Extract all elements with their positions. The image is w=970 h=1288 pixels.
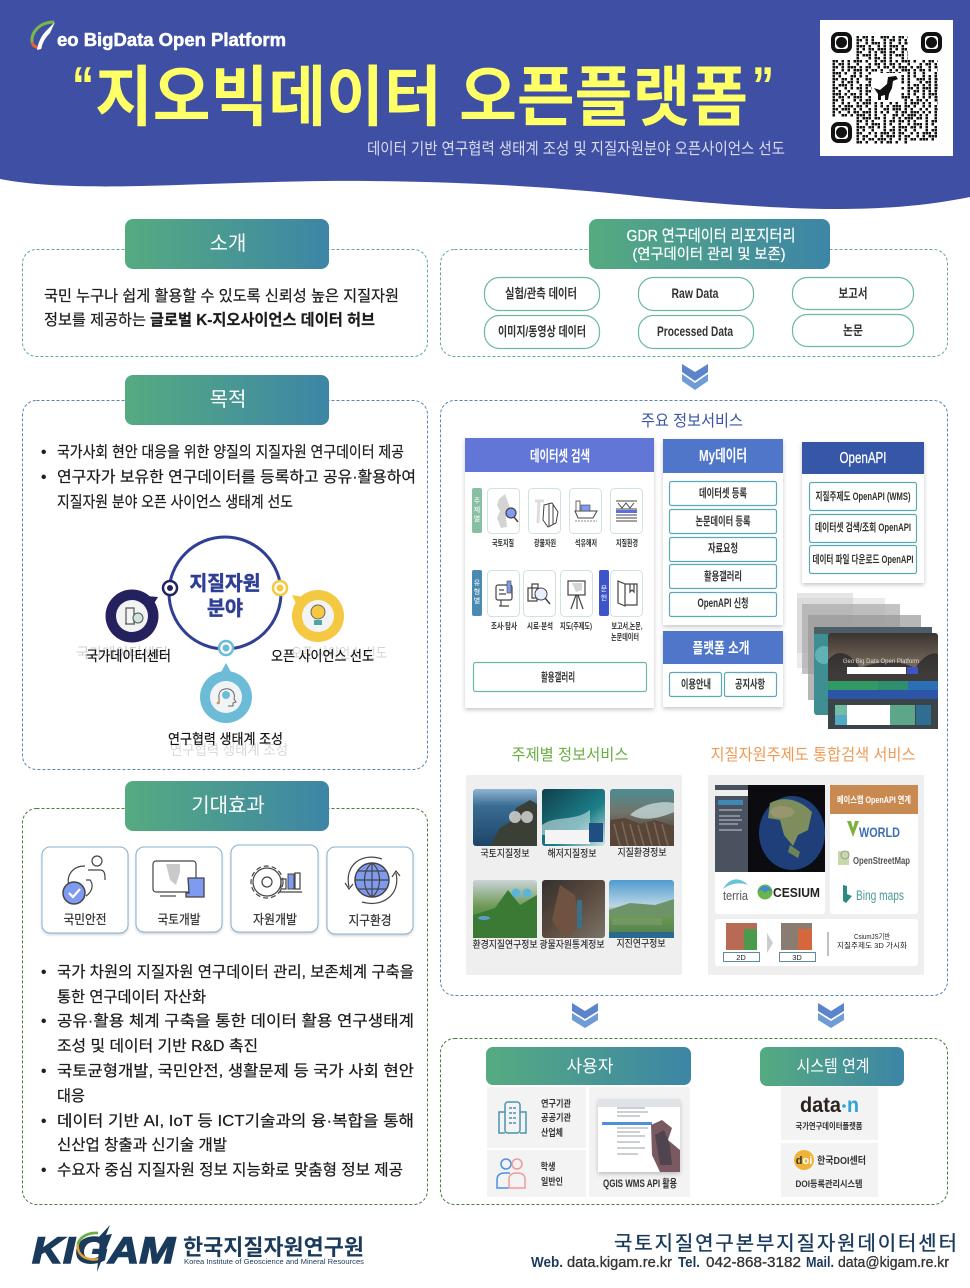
text: 기대효과 bullets [41,963,414,1179]
tag: 유형별: 형 [474,588,480,596]
tile: 조사·탐사 [488,570,520,631]
card: 국토개발: 국토개발 [158,912,201,927]
center circle: 지질자원 [190,572,260,595]
data type pills: Raw Data [672,285,719,301]
card: My데이터: 데이터셋 등록 [699,486,747,500]
heading: 시스템 연계 [760,1047,904,1086]
2D/3D visualization strip: 3D [792,953,802,962]
thumbnail: 지질환경정보 [610,789,674,859]
node rings [163,581,287,655]
basemap panel [830,785,918,914]
system: 한국DOI센터 [781,1143,878,1197]
QR code [820,20,953,156]
system: data·on [781,1087,878,1140]
heading: 주제별 정보서비스: 주제별 정보서비스 [512,746,628,764]
panel: GDR 리포지터리 [440,219,948,356]
system: 한국DOI센터: doi [796,1155,812,1167]
card: My데이터: My데이터 [699,447,747,465]
center circle [169,537,281,649]
user: 연구기관 공공기관 산업체: 공공기관 [541,1112,571,1124]
card: 데이터셋 검색: 데이터셋 검색 [530,448,590,465]
user: 학생 일반인: 일반인 [541,1176,563,1188]
tag: 주제별: 제 [474,506,480,514]
tile: 석유해저 [570,488,602,548]
card: 플랫폼 소개: 플랫폼 소개 [692,640,750,657]
card: OpenAPI [802,442,924,583]
tile: 지질환경: 지질환경 [616,538,638,548]
thumbnail: 지진연구정보: 지진연구정보 [616,938,666,950]
text: 기대효과 bullets: 수요자 중심 지질자원 정보 지능화로 맞춤형 정보 제공 [57,1161,403,1179]
tag: 문헌 [599,570,609,616]
footer logo: KIGAM: 한국지질자원연구원 [183,1235,364,1260]
basemap panel: 베이스맵 OpenAPI 연계 [837,794,911,805]
tag: 문헌: 헌 [601,594,607,602]
footer: contact: data.kigam.re.kr [567,1254,672,1271]
system: 한국DOI센터: 한국DOI센터 [817,1154,866,1167]
subtitle: 데이터 기반 연구협력 생태계 조성 및 지질자원분야 오픈사이언스 선도 [367,140,785,158]
node: 국가데이터센터: 국가데이터센터 [86,648,171,664]
panel: 사용자 / 시스템 연계 [440,1038,948,1204]
title: ” [752,57,774,115]
footer: contact: Web. [531,1254,563,1271]
heading: 사용자 [486,1047,691,1085]
node: 국가데이터센터 [76,590,171,664]
tile: 시료·분석: 시료·분석 [527,621,553,631]
thumbnail: 해저지질정보 [542,789,605,860]
tile: 국토지질: 국토지질 [492,538,514,548]
tile: 보고서,논문,논문데이터: 논문데이터 [611,632,639,642]
viewer: terria + cesium: CESIUM [773,885,820,900]
text: 소개 body [44,287,399,329]
2D/3D visualization strip: CsiumJS기반 [854,932,890,941]
tile: 석유해저: 석유해저 [575,538,597,548]
footer logo: KIGAM: Korea Institute of Geoscience and Mineral Resources [184,1259,365,1266]
text: 기대효과 bullets: 국토균형개발, 국민안전, 생활문제 등 국가 사회 현안 [57,1062,414,1080]
tag: 유형별 [472,570,482,616]
card: My데이터: 자료요청 [708,541,738,555]
tag: 주제별: 별 [474,514,480,523]
text: 기대효과 bullets: • [41,1063,46,1080]
user: 학생 일반인 [487,1150,586,1197]
button: 활용갤러리 [474,662,646,692]
thumbnail: 국토지질정보 [473,789,537,860]
thumbnail: 국토지질정보: 국토지질정보 [480,848,530,860]
heading: GDR 연구데이터 리포지터리: (연구데이터 관리 및 보존) [632,246,786,263]
card: My데이터: OpenAPI 신청 [698,596,748,610]
heading: 목적: 목적 [210,388,246,411]
tag: 문헌: 문 [601,585,608,593]
card: My데이터: 활용갤러리 [704,569,742,583]
thumbnail: 환경지질연구정보 [472,880,538,951]
card: OpenAPI: 데이터 파일 다운로드 OpenAPI [812,552,914,566]
system: data·on: n [847,1094,859,1117]
tile: 광물자원: 광물자원 [534,538,556,548]
thumbnail: 환경지질연구정보: 환경지질연구정보 [472,938,538,951]
card: 국토개발 [136,847,222,932]
basemap panel: WORLD [859,824,900,840]
heading: 기대효과 [125,781,329,831]
card: 플랫폼 소개: 이용안내 [681,677,711,691]
2D/3D visualization strip [715,919,918,966]
text: 기대효과 bullets: 데이터 기반 AI, IoT 등 ICT기술과의 융·복합을 통해 [57,1112,414,1130]
footer: contact: data@kigam.re.kr [838,1254,949,1271]
heading: 기대효과: 기대효과 [191,794,265,817]
card: 플랫폼 소개: 공지사항 [735,677,765,691]
user: 연구기관 공공기관 산업체 [487,1087,586,1148]
panel: 통합검색 서비스 [708,775,924,975]
heading: 사용자: 사용자 [567,1057,614,1076]
card: 자원개발: 자원개발 [253,912,297,927]
tag: 주제별 [472,488,482,533]
2D/3D visualization strip: 지질주제도 3D 가시화 [837,941,907,950]
heading: 지질자원주제도 통합검색 서비스: 지질자원주제도 통합검색 서비스 [710,746,916,764]
arrow: services to system [818,1003,844,1028]
card: 국민안전 [42,847,128,933]
heading: 주요 정보서비스: 주요 정보서비스 [641,412,743,430]
node: 연구협력 생태계 조성: 연구협력 생태계 조성 [168,731,283,747]
panel: 주제별 thumbnails [466,775,682,975]
card: My데이터 [663,439,783,625]
footer: contact: 042-868-3182 [706,1254,801,1271]
card: 데이터셋 검색 [465,438,654,708]
text: 목적 bullets: 연구자가 보유한 연구데이터를 등록하고 공유·활용하여 [57,468,416,486]
thumbnail: 지질환경정보: 지질환경정보 [618,846,666,859]
text: 기대효과 bullets: 조성 및 데이터 기반 R&D 촉진 [57,1037,258,1055]
card: 지구환경 [327,847,413,934]
data type pills: Processed Data [657,323,733,339]
QGIS WMS API screenshot [589,1087,690,1197]
node: 오픈 사이언스 선도: 오픈 사이언스 선도 [291,645,387,661]
footer: contact: 국토지질연구본부지질자원데이터센터 [614,1232,957,1255]
heading: GDR 연구데이터 리포지터리 [589,219,830,269]
system: 한국DOI센터: DOI등록관리시스템 [796,1178,862,1189]
panel: 목적 [22,375,428,770]
center circle: 분야 [207,597,243,620]
node: 오픈 사이언스 선도 [271,590,387,664]
system: data·on: data [800,1094,841,1117]
node: 연구협력 생태계 조성: 연구협력 생태계 조성 [170,742,288,758]
footer: contact [531,1232,957,1271]
panel: 기대효과 [22,781,428,1204]
card: OpenAPI: 지질주제도 OpenAPI (WMS) [816,489,911,503]
heading: 소개: 소개 [210,232,246,255]
heading: 목적 [125,375,329,425]
text: 소개 body: 국민 누구나 쉽게 활용할 수 있도록 신뢰성 높은 지질자원 [44,287,399,305]
tile: 광물자원 [528,488,560,548]
text: 기대효과 bullets: • [41,1162,46,1179]
text: 목적 bullets [41,443,416,511]
card: 플랫폼 소개 [663,631,783,707]
user: 학생 일반인: 학생 [540,1161,556,1173]
text: 소개 body: 글로벌 K-지오사이언스 데이터 허브 [150,311,375,329]
basemap panel: OpenStreetMap [853,856,910,867]
heading: 소개 [125,219,329,269]
text: 기대효과 bullets: • [41,1013,46,1030]
system: data·on: 국가연구데이터플랫폼 [796,1121,863,1131]
text: 목적 bullets: • [41,469,46,486]
2D/3D visualization strip: 2D [736,953,746,962]
screenshots: platform web pages [797,593,938,729]
arrow: GDR to services [682,364,708,390]
text: 목적 bullets: • [41,444,46,461]
header banner [0,0,970,209]
data type pills: 이미지/동영상 데이터 [498,324,586,339]
footer logo: KIGAM: KIGAM [32,1230,176,1271]
text: 목적 bullets: 국가사회 현안 대응을 위한 양질의 지질자원 연구데이터 제공 [57,443,404,461]
text: 기대효과 bullets: 국가 차원의 지질자원 연구데이터 관리, 보존체계 구축을 [57,963,414,981]
data type pills: 논문 [843,323,863,338]
card: 국민안전: 국민안전 [64,912,106,927]
panel: 소개 [22,219,428,356]
thumbnail: 광물자원통계정보: 광물자원통계정보 [540,939,604,951]
logo: Geo BigData Open Platform: eo BigData Open Platform [57,30,286,50]
tile: 조사·탐사: 조사·탐사 [491,621,517,631]
footer: contact: Mail. [806,1254,834,1271]
node: 오픈 사이언스 선도: 오픈 사이언스 선도 [271,648,374,664]
QGIS WMS API screenshot: QGIS WMS API 활용 [603,1176,677,1190]
title: 지오빅데이터 오픈플랫폼 [95,60,748,134]
button: 활용갤러리: 활용갤러리 [541,670,575,684]
basemap panel: Bing maps [856,887,904,903]
arrow: services to users [572,1003,598,1028]
data type pills [484,278,914,348]
text: 기대효과 bullets: • [41,964,46,981]
node: 연구협력 생태계 조성 [168,663,288,758]
text: 기대효과 bullets: 신산업 창출과 신기술 개발 [57,1136,227,1154]
heading: GDR 연구데이터 리포지터리: GDR 연구데이터 리포지터리 [626,227,796,245]
diagram: 지질자원 분야 [76,537,387,758]
text: 기대효과 bullets: 대응 [57,1087,85,1105]
tile: 지질환경 [610,488,642,548]
thumbnail: 해저지질정보: 해저지질정보 [548,847,596,860]
tag: 유형별: 별 [474,596,480,605]
user: 연구기관 공공기관 산업체: 연구기관 [541,1098,571,1110]
data type pills: 실험/관측 데이터 [505,286,577,301]
panel: 주요 정보서비스 [440,400,948,996]
data type pills: 보고서 [838,286,868,301]
card: 지구환경: 지구환경 [348,913,392,928]
text: 소개 body: 정보를 제공하는 [44,311,146,329]
tile: 국토지질 [488,488,520,548]
thumbnail: 광물자원통계정보 [540,880,605,951]
logo: Geo BigData Open Platform [32,22,286,50]
footer: contact: Tel. [678,1254,700,1271]
tag: 주제별: 주 [474,497,481,505]
text: 기대효과 bullets: 공유·활용 체계 구축을 통한 데이터 활용 연구생태계 [57,1012,414,1030]
footer logo: KIGAM [32,1225,365,1272]
title: “ [72,57,94,115]
thumbnail: 지진연구정보 [609,880,674,950]
screenshots: platform web pages: Geo Big Data Open Platform [843,659,919,665]
card: OpenAPI: OpenAPI [840,450,886,467]
card: 자원개발 [231,845,318,932]
tile: 보고서,논문,논문데이터: 보고서,논문, [612,621,642,631]
tile: 보고서,논문,논문데이터 [610,570,642,642]
tile: 지도(주제도): 지도(주제도) [560,621,592,631]
text: 기대효과 bullets: 통한 연구데이터 자산화 [57,988,206,1006]
card: My데이터: 논문데이터 등록 [696,514,751,528]
text: 목적 bullets: 지질자원 분야 오픈 사이언스 생태계 선도 [57,493,293,511]
node: 국가데이터센터: 국가데이터센터 [76,645,168,661]
user: 연구기관 공공기관 산업체: 산업체 [541,1127,563,1139]
viewer: terria + cesium [715,785,825,914]
card: OpenAPI: 데이터셋 검색/조회 OpenAPI [815,520,911,534]
tile: 시료·분석 [524,570,556,631]
tile: 지도(주제도) [560,570,592,631]
viewer: terria + cesium: terria [723,888,749,903]
tag: 유형별: 유 [474,579,481,587]
heading: 시스템 연계: 시스템 연계 [796,1057,870,1076]
text: 기대효과 bullets: • [41,1113,46,1130]
